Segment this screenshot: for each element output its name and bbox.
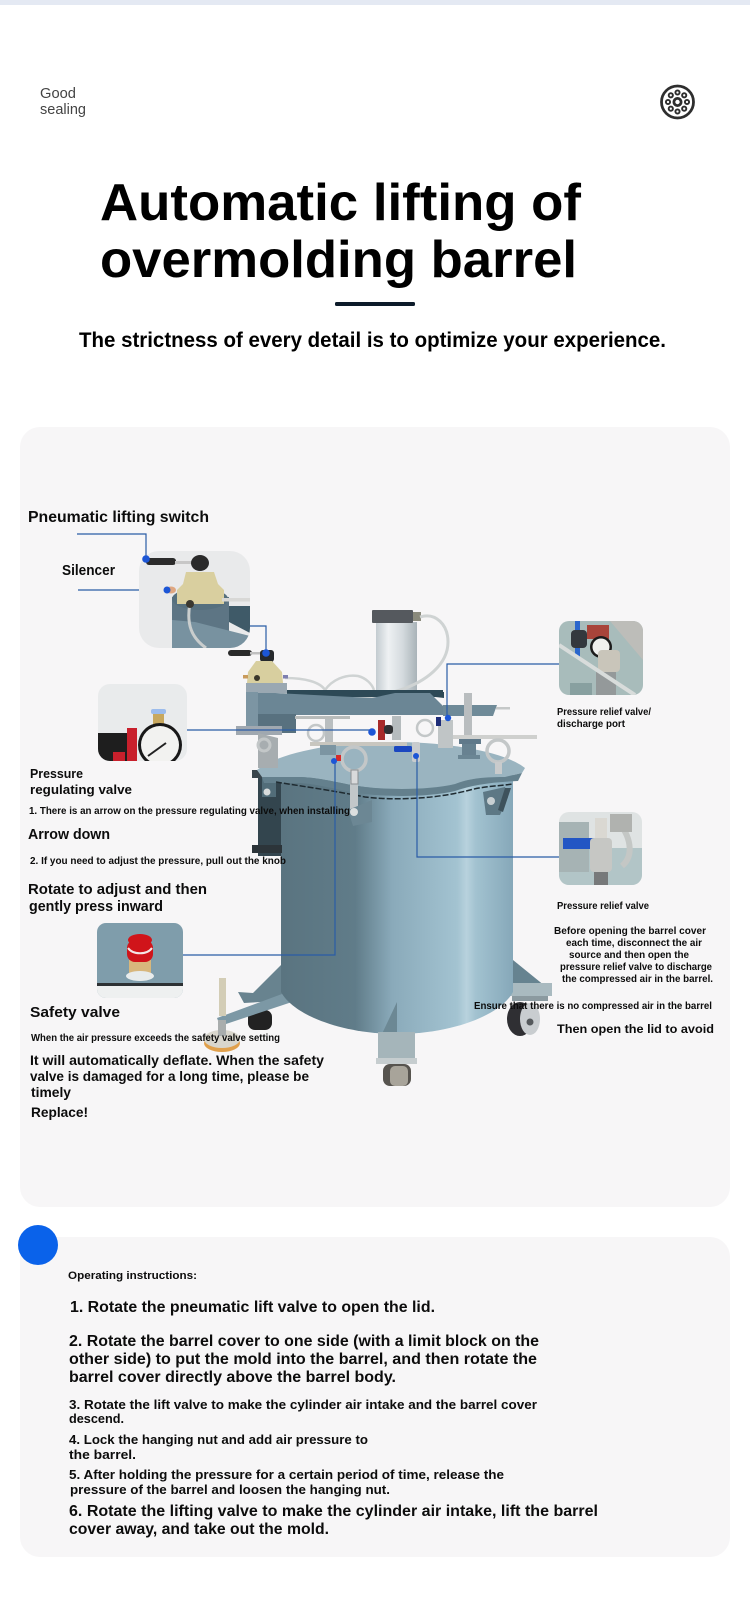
title: Automatic lifting of <box>100 174 582 232</box>
lid <box>257 742 525 799</box>
label: silencer: Silencer <box>62 562 115 579</box>
label: pneumatic lifting switch: Pneumatic lifting switch <box>28 509 209 526</box>
text block: safety valve: timely <box>31 1085 71 1100</box>
blue circle marker <box>18 1225 58 1265</box>
text block: operating instructions: the barrel. <box>69 1448 136 1462</box>
text block: pressure relief valve: Before opening the barrel cover <box>554 926 706 937</box>
text block: operating instructions: other side) to put the mold into the barrel, and then rotate the <box>69 1351 537 1368</box>
inset: pressure gauge close-up <box>98 684 187 767</box>
text block: safety valve: It will automatically deflate. When the safety <box>30 1053 324 1068</box>
text block: pressure relief valve: Ensure that there is no compressed air in the barrel <box>474 1001 712 1012</box>
inset: relief valve and discharge port close-up <box>559 621 643 695</box>
icon: sealing flange <box>662 86 694 118</box>
text block: pressure regulating valve: regulating valve <box>30 783 132 797</box>
text block: operating instructions: 1. Rotate the pneumatic lift valve to open the lid. <box>70 1299 435 1316</box>
text block: pressure relief valve: source and then open the <box>569 950 689 961</box>
left leg with leveling foot <box>204 965 292 1052</box>
text block: pressure regulating valve: 2. If you need to adjust the pressure, pull out the knob <box>30 856 286 867</box>
text block: pressure relief valve: the compressed air in the barrel. <box>562 974 713 985</box>
text block: pressure relief valve: pressure relief valve to discharge <box>560 962 712 973</box>
text block: pressure regulating valve <box>28 767 350 915</box>
inset: safety valve close-up <box>97 923 183 998</box>
panel: operating instructions background <box>20 1237 730 1557</box>
inset: lift switch close-up <box>139 551 250 648</box>
text block: operating instructions: pressure of the barrel and loosen the hanging nut. <box>70 1483 390 1497</box>
eye bolts <box>258 720 509 784</box>
front caster <box>376 1002 417 1086</box>
lid posts, handles and bolts <box>295 693 537 759</box>
text block: operating instructions: barrel cover directly above the barrel body. <box>69 1369 396 1386</box>
leader lines <box>77 534 559 955</box>
text block: safety valve <box>30 1005 324 1120</box>
right caster <box>507 960 552 1036</box>
title: overmolding barrel <box>100 231 577 289</box>
barrel body <box>281 775 513 1034</box>
lift switch valve <box>228 650 288 683</box>
text block: pressure relief valve: Then open the lid to avoid <box>557 1024 714 1036</box>
text block: operating instructions <box>68 1270 598 1538</box>
lifting arm <box>236 683 510 768</box>
text block: safety valve: valve is damaged for a long time, please be <box>30 1069 309 1084</box>
text block: pressure relief valve: Pressure relief valve <box>557 901 649 912</box>
text block: operating instructions: Operating instructions: <box>68 1270 197 1282</box>
title rule <box>335 302 415 306</box>
text block: operating instructions: 3. Rotate the lift valve to make the cylinder air intake and the barrel cover <box>69 1398 537 1412</box>
text block: pressure regulating valve: Rotate to adjust and then <box>28 881 207 898</box>
text block: operating instructions: cover away, and take out the mold. <box>69 1521 329 1538</box>
lid clamps <box>348 780 511 826</box>
text block: pressure relief valve: each time, disconnect the air <box>566 938 702 949</box>
text block: operating instructions: 2. Rotate the barrel cover to one side (with a limit block on the <box>69 1333 539 1350</box>
callout dots <box>142 555 451 764</box>
label: pressure relief valve / discharge port <box>557 707 651 730</box>
text block: operating instructions: 4. Lock the hanging nut and add air pressure to <box>69 1433 368 1447</box>
text block: pressure regulating valve: gently press inward <box>29 898 163 915</box>
text block: operating instructions: descend. <box>69 1412 124 1426</box>
text block: safety valve: Safety valve <box>30 1005 120 1021</box>
text block: safety valve: When the air pressure exceeds the safety valve setting <box>31 1033 280 1044</box>
label: pressure relief valve / discharge port: Pressure relief valve/ <box>557 707 651 718</box>
label: pressure relief valve / discharge port: discharge port <box>557 719 626 730</box>
top accent bar <box>0 0 750 5</box>
tagline: good sealing: sealing <box>40 102 86 118</box>
text block: operating instructions: 6. Rotate the lifting valve to make the cylinder air intake, lift the barrel <box>69 1503 598 1520</box>
cylinder <box>372 610 421 694</box>
text block: pressure regulating valve: Arrow down <box>28 827 110 843</box>
text block: pressure regulating valve: Pressure <box>30 767 83 781</box>
illustration: pressure barrel machine <box>204 610 552 1086</box>
tagline: good sealing <box>40 86 86 118</box>
text block: pressure regulating valve: 1. There is an arrow on the pressure regulating valve, when installing <box>29 806 350 817</box>
subtitle: The strictness of every detail is to optimize your experience. <box>79 329 666 352</box>
panel: machine diagram background <box>20 427 730 1207</box>
text block: safety valve: Replace! <box>31 1104 88 1120</box>
side hinge cylinder <box>252 770 282 856</box>
title <box>100 174 582 289</box>
fittings and regulator <box>336 717 453 762</box>
tagline: good sealing: Good <box>40 86 76 102</box>
air hoses <box>254 616 448 700</box>
text block: operating instructions: 5. After holding the pressure for a certain period of time, release the <box>69 1468 504 1482</box>
inset: relief valve close-up <box>559 812 642 885</box>
text block: pressure relief valve <box>474 901 714 1036</box>
